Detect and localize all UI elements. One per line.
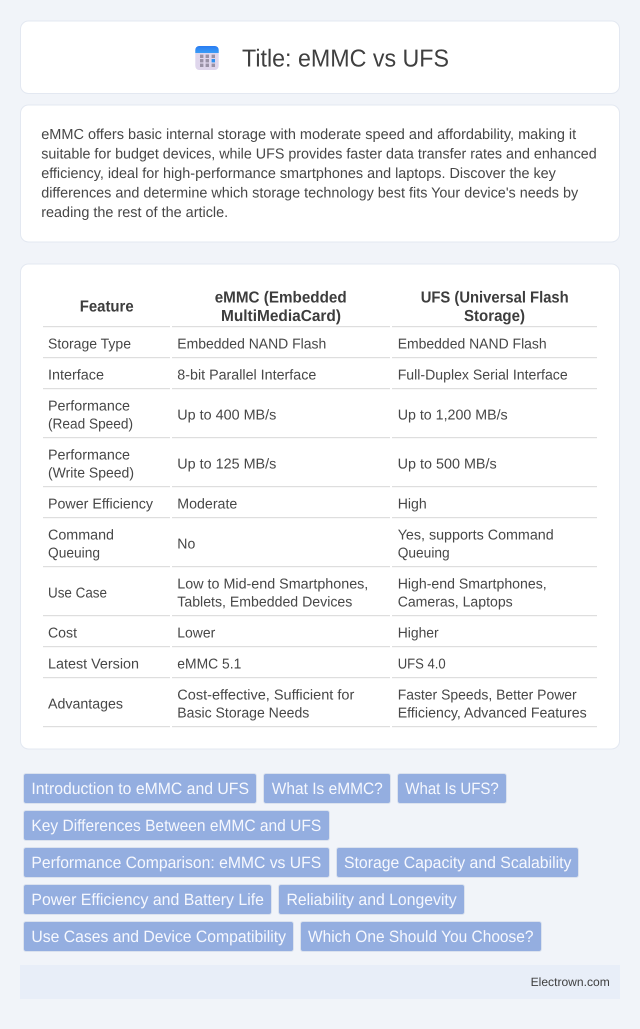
row: command queuing: Command: [48, 527, 114, 543]
tag: what is eMMC: [264, 774, 390, 804]
intro paragraph: efficiency, ideal for high-performance smartphones and laptops. Discover the key: [41, 166, 557, 182]
row: write speed: [48, 447, 497, 481]
row: advantages: Efficiency, Advanced Features: [398, 705, 587, 721]
row: latest version: UFS 4.0: [398, 656, 446, 672]
row: use case: [48, 576, 547, 610]
title: Title: eMMC vs UFS: [242, 46, 449, 72]
intro paragraph: eMMC offers basic internal storage with moderate speed and affordability, making it: [41, 127, 576, 143]
tag: storage capacity: [336, 848, 578, 878]
row: use case: Low to Mid-end Smartphones,: [177, 576, 368, 592]
tag: performance comparison: [24, 848, 330, 878]
row: advantages: Cost-effective, Sufficient for: [177, 687, 355, 703]
tag: use cases: [24, 922, 294, 952]
table header row: Storage): [464, 308, 525, 325]
intro paragraph: differences and determine which storage technology best fits Your device's needs by: [41, 185, 579, 201]
row: write speed: Performance: [48, 447, 130, 463]
row: interface: Full-Duplex Serial Interface: [398, 367, 568, 383]
row: latest version: eMMC 5.1: [177, 656, 241, 672]
tag: what is UFS: What Is UFS?: [405, 780, 499, 798]
row: command queuing: Yes, supports Command: [398, 527, 554, 543]
row: read speed: (Read Speed): [48, 416, 133, 432]
row: power efficiency: [48, 496, 427, 512]
row: latest version: [48, 656, 446, 672]
row: read speed: [48, 398, 508, 432]
tag: what is UFS: [398, 774, 506, 804]
row: cost: Lower: [177, 625, 216, 641]
row: read speed: Performance: [48, 398, 130, 414]
row: advantages: Faster Speeds, Better Power: [398, 687, 577, 703]
tag: reliability: [278, 884, 464, 914]
footer bar: [20, 965, 620, 999]
row: interface: [48, 367, 568, 383]
row: use case: Use Case: [48, 585, 107, 601]
tag: storage capacity: Storage Capacity and Scalability: [344, 854, 572, 872]
row: write speed: (Write Speed): [48, 465, 134, 481]
tag: performance comparison: Performance Comparison: eMMC vs UFS: [31, 854, 321, 872]
row: cost: [48, 625, 439, 641]
row: use case: Tablets, Embedded Devices: [177, 594, 352, 610]
footer credit: Electrown.com: [531, 975, 610, 989]
tag: power efficiency: Power Efficiency and Battery Life: [31, 891, 264, 909]
row: storage type: Storage Type: [48, 336, 131, 352]
row: advantages: Basic Storage Needs: [177, 705, 309, 721]
row: storage type: Embedded NAND Flash: [177, 336, 326, 352]
row: write speed: Up to 500 MB/s: [398, 456, 497, 472]
row: command queuing: No: [177, 536, 195, 552]
panel: comparison table: [20, 264, 620, 749]
row: power efficiency: Power Efficiency: [48, 496, 154, 512]
row: command queuing: Queuing: [48, 545, 100, 561]
row: read speed: Up to 1,200 MB/s: [398, 407, 508, 423]
row: write speed: Up to 125 MB/s: [177, 456, 276, 472]
tag: which one: Which One Should You Choose?: [308, 928, 534, 946]
row: command queuing: Queuing: [398, 545, 450, 561]
table header row: [80, 289, 569, 325]
row: command queuing: [48, 527, 554, 561]
panel: introduction: [20, 105, 620, 242]
tag: key differences: [24, 810, 330, 840]
row: advantages: Advantages: [48, 696, 123, 712]
intro paragraph: reading the rest of the article.: [41, 205, 228, 221]
table header row: eMMC (Embedded: [215, 289, 347, 306]
row: cost: Cost: [48, 625, 77, 641]
tag: introduction: Introduction to eMMC and UFS: [31, 780, 249, 798]
tag: key differences: Key Differences Between eMMC and UFS: [31, 817, 321, 835]
row: read speed: Up to 400 MB/s: [177, 407, 276, 423]
tag: use cases: Use Cases and Device Compatibility: [31, 928, 287, 946]
icon: calendar grid: [195, 46, 219, 70]
intro paragraph: [41, 127, 597, 221]
row: interface: 8-bit Parallel Interface: [177, 367, 316, 383]
table header row: UFS (Universal Flash: [421, 289, 569, 306]
tag: introduction: [24, 774, 256, 804]
table header row: Feature: [80, 299, 134, 316]
row: use case: Cameras, Laptops: [398, 594, 513, 610]
row: storage type: [48, 336, 547, 352]
tag: power efficiency: [24, 884, 272, 914]
intro paragraph: suitable for budget devices, while UFS provides faster data transfer rates and enhanced: [41, 146, 597, 162]
table header row: MultiMediaCard): [221, 308, 341, 325]
row: storage type: Embedded NAND Flash: [398, 336, 547, 352]
row: cost: Higher: [398, 625, 439, 641]
tag: reliability: Reliability and Longevity: [286, 891, 457, 909]
row: power efficiency: High: [398, 496, 427, 512]
row: advantages: [48, 687, 587, 721]
row: use case: High-end Smartphones,: [398, 576, 547, 592]
row: latest version: Latest Version: [48, 656, 139, 672]
row: power efficiency: Moderate: [177, 496, 237, 512]
panel: title header: [20, 21, 620, 94]
tag: what is eMMC: What Is eMMC?: [272, 780, 383, 798]
topic tags: [24, 774, 578, 952]
row: interface: Interface: [48, 367, 104, 383]
tag: which one: [300, 922, 542, 952]
